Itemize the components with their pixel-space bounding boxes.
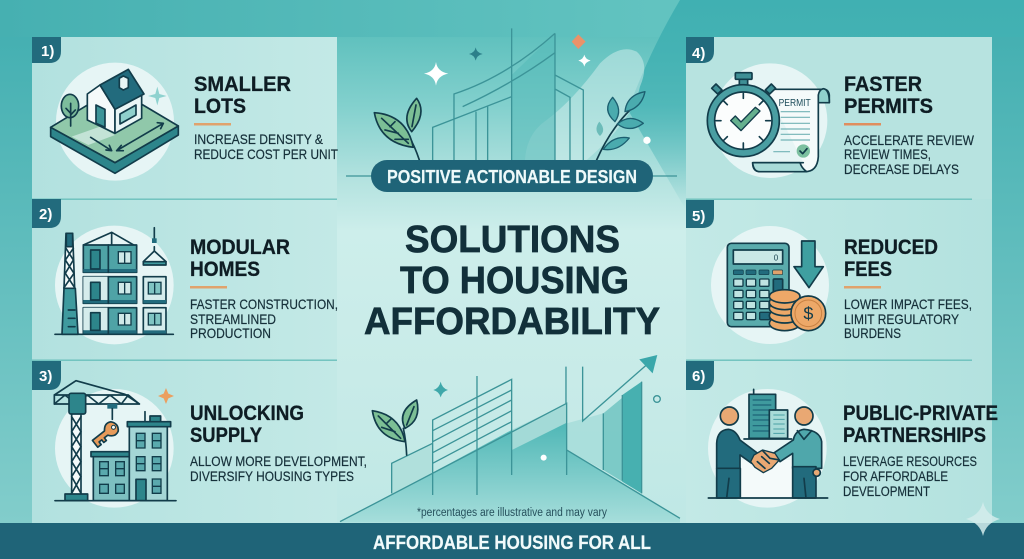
- panel: faster permits: [686, 37, 992, 199]
- badge 6: 6): [692, 368, 705, 385]
- heading: HOMES: [190, 258, 260, 281]
- icon: house on small lot: [51, 63, 178, 181]
- badge 1: [32, 37, 61, 63]
- title: AFFORDABILITY: [364, 301, 660, 343]
- description: REVIEW TIMES,: [844, 147, 931, 162]
- description: [844, 133, 974, 177]
- illustration: bottom skyline and growth arrow: [340, 355, 680, 523]
- badge 1: 1): [41, 43, 54, 60]
- accent rule: [190, 286, 227, 288]
- description: DEVELOPMENT: [843, 484, 930, 499]
- heading: PARTNERSHIPS: [843, 424, 986, 447]
- heading: SMALLER: [194, 73, 291, 96]
- heading: [844, 73, 933, 118]
- heading: PUBLIC-PRIVATE: [843, 402, 998, 425]
- icon: modular building: [55, 226, 174, 344]
- title: [364, 219, 660, 343]
- footer banner: AFFORDABLE HOUSING FOR ALL: [373, 533, 651, 554]
- heading: PERMITS: [844, 95, 933, 118]
- icon: stopwatch and permit: [707, 63, 829, 178]
- badge 2: 2): [39, 206, 52, 223]
- heading: FASTER: [844, 73, 922, 96]
- description: BURDENS: [844, 326, 901, 341]
- heading: [194, 73, 291, 118]
- badge 4: 4): [692, 45, 705, 62]
- badge 2: [32, 199, 61, 228]
- accent rule: [844, 286, 881, 288]
- heading: FEES: [844, 258, 892, 281]
- accent rule: [844, 123, 881, 126]
- description: INCREASE DENSITY &: [194, 132, 323, 147]
- badge 6: [686, 361, 714, 390]
- heading: SUPPLY: [190, 424, 262, 447]
- description: FOR AFFORDABLE: [843, 469, 948, 484]
- heading: [190, 402, 304, 447]
- heading: [190, 236, 290, 281]
- description: STREAMLINED: [190, 312, 276, 327]
- pill banner: positive actionable design: [346, 160, 677, 192]
- badge 4: [686, 37, 714, 63]
- panel: reduced fees: [686, 198, 992, 360]
- heading: [844, 236, 938, 281]
- footer banner: [0, 523, 1024, 559]
- icon: stopwatch and permit: PERMIT: [779, 98, 811, 109]
- icon: white sparkle: [966, 502, 1000, 536]
- description: [190, 454, 367, 484]
- icon: crane and key: [54, 381, 176, 508]
- illustration: top building and leaves: [374, 28, 651, 160]
- badge 5: [686, 200, 714, 228]
- icon: handshake: [708, 389, 828, 508]
- icon: calculator and coins: [711, 226, 829, 344]
- heading: REDUCED: [844, 236, 938, 259]
- badge 3: 3): [39, 368, 52, 385]
- icon: calculator and coins: $: [803, 304, 813, 324]
- description: [190, 297, 338, 341]
- icon: calculator and coins: 0: [774, 253, 779, 262]
- description: [194, 132, 338, 162]
- badge 3: [32, 361, 61, 390]
- panel: unlocking supply: [32, 360, 367, 523]
- description: LEVERAGE RESOURCES: [843, 454, 977, 469]
- heading: MODULAR: [190, 236, 290, 259]
- pill banner: positive actionable design: POSITIVE ACTIONABLE DESIGN: [387, 167, 637, 187]
- heading: [843, 402, 998, 447]
- footnote: *percentages are illustrative and may vary: [417, 507, 607, 519]
- panel: smaller lots: [32, 37, 338, 199]
- title: TO HOUSING: [400, 260, 629, 302]
- description: FASTER CONSTRUCTION,: [190, 297, 338, 312]
- description: DECREASE DELAYS: [844, 162, 959, 177]
- description: REDUCE COST PER UNIT: [194, 147, 338, 162]
- heading: UNLOCKING: [190, 402, 304, 425]
- badge 5: 5): [692, 208, 705, 225]
- title: SOLUTIONS: [405, 219, 620, 261]
- description: DIVERSIFY HOUSING TYPES: [190, 469, 354, 484]
- heading: LOTS: [194, 95, 246, 118]
- description: PRODUCTION: [190, 326, 271, 341]
- description: LOWER IMPACT FEES,: [844, 297, 972, 312]
- panel: public-private partnerships: [686, 360, 998, 523]
- panel: modular homes: [32, 198, 338, 360]
- description: [844, 297, 972, 341]
- accent rule: [194, 123, 231, 126]
- description: [843, 454, 977, 499]
- description: ACCELERATE REVIEW: [844, 133, 974, 148]
- description: LIMIT REGULATORY: [844, 312, 959, 327]
- description: ALLOW MORE DEVELOPMENT,: [190, 454, 367, 469]
